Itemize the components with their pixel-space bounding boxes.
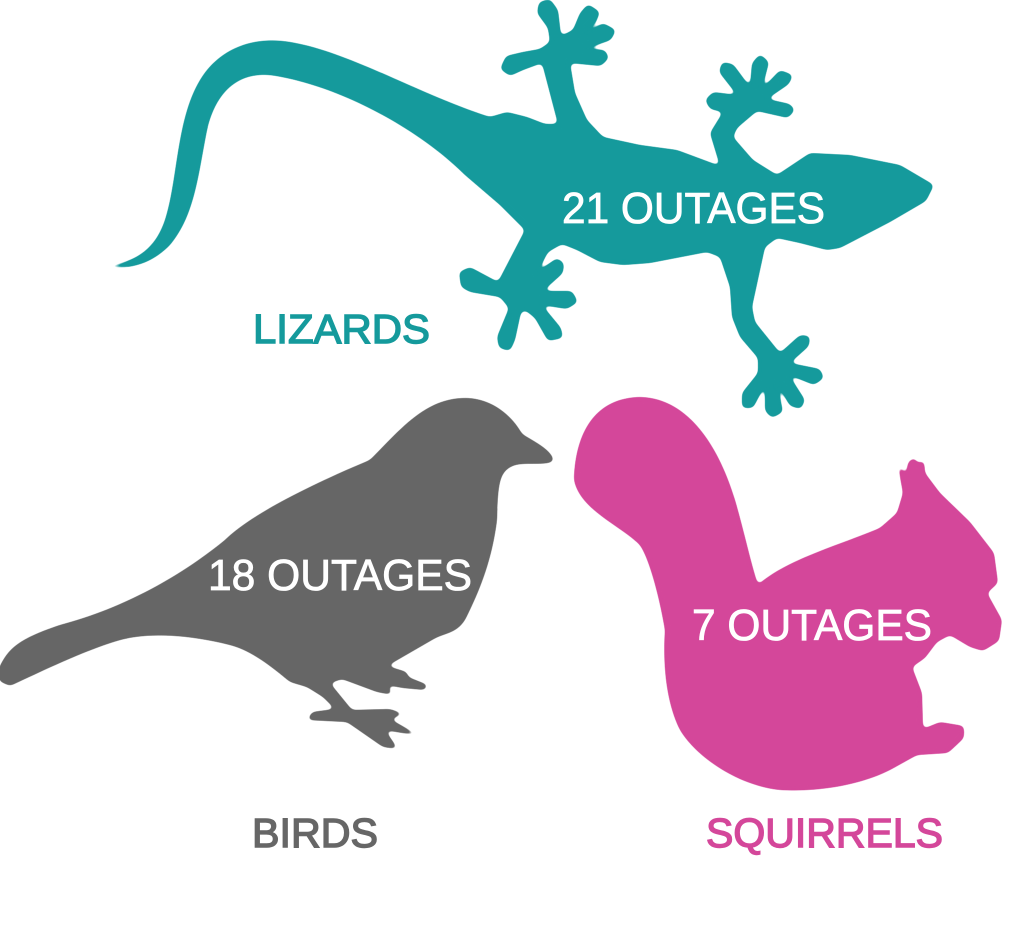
label: 21 outages: 21 OUTAGES [562, 184, 825, 233]
icon: bird silhouette [0, 398, 554, 749]
heading: lizards: LIZARDS [253, 306, 430, 352]
label: 18 outages: 18 OUTAGES [208, 551, 472, 600]
icon: squirrel silhouette [574, 397, 1002, 790]
heading: squirrels: SQUIRRELS [706, 810, 943, 856]
heading: birds: BIRDS [252, 810, 378, 856]
label: 7 outages: 7 OUTAGES [692, 601, 932, 650]
icon: lizard silhouette [98, 0, 934, 418]
